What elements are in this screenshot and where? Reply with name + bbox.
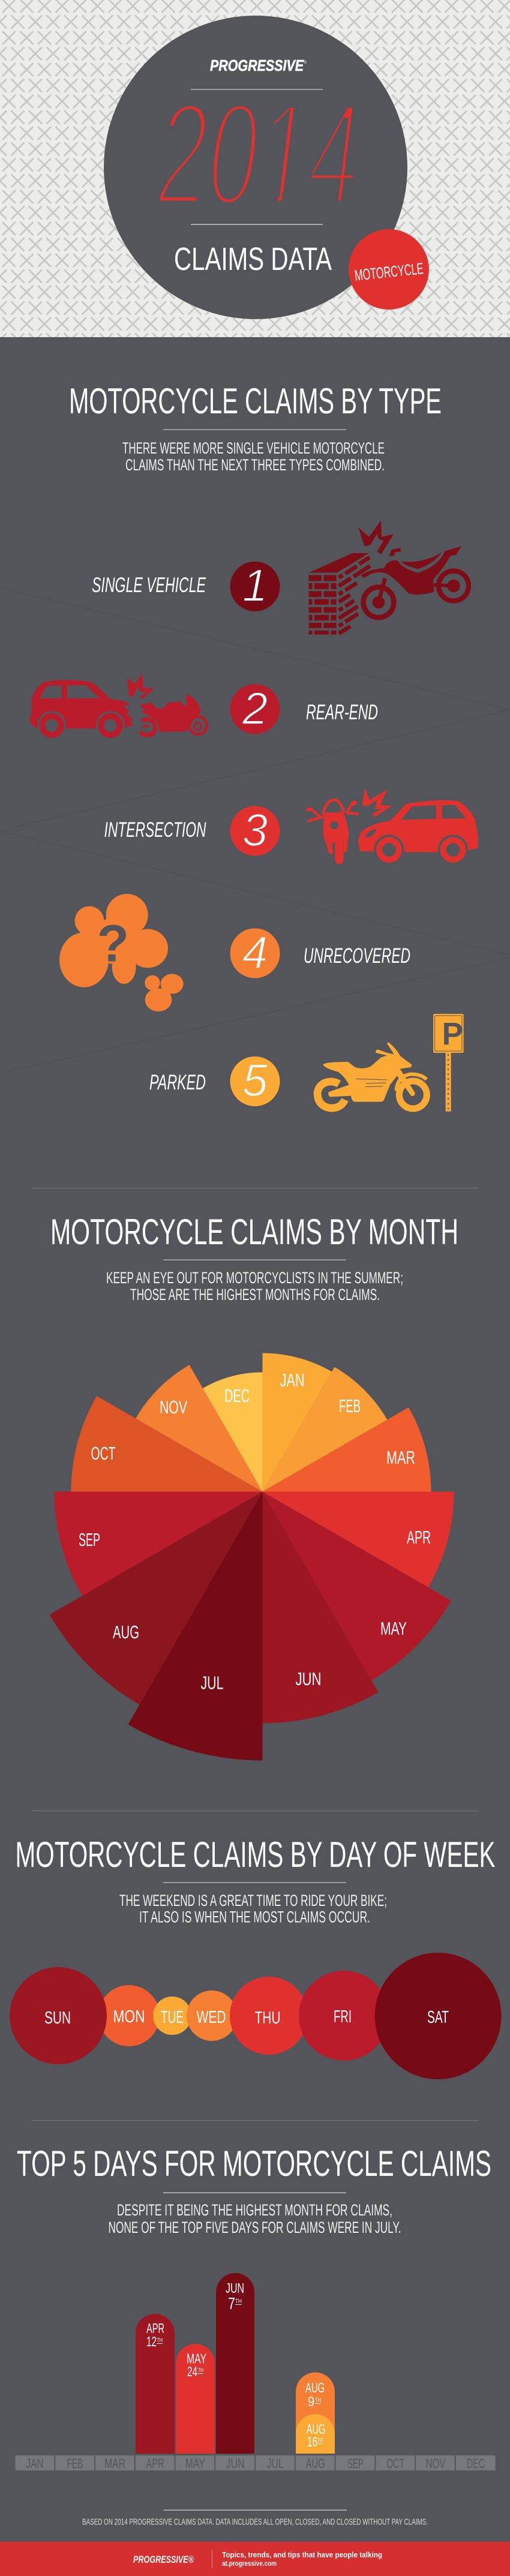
day labels: SAT [427,2008,449,2027]
month axis: MAY [185,2456,205,2471]
month labels: NOV [160,1397,187,1418]
number 1: 1 [242,560,268,611]
day labels [44,2007,449,2028]
month axis: FEB [67,2456,83,2471]
claims data title: CLAIMS DATA [174,241,332,277]
dark circle [104,16,407,319]
number 1 [230,560,280,611]
month axis: JAN [26,2456,43,2471]
month labels: MAY [380,1618,407,1639]
bar: Aug 9: AUG [305,2380,325,2395]
month axis: JUN [226,2456,245,2471]
bar: Apr 12: 12 [146,2334,157,2349]
month labels: JUN [295,1668,322,1689]
wedge: SEP [54,1491,263,1596]
label: unrecovered: UNRECOVERED [304,944,410,968]
intro text [106,1269,403,1304]
bar: Aug 9 [296,2372,335,2454]
section: claims by day of week [10,1835,502,2079]
wedge: APR [263,1491,454,1587]
label: intersection: INTERSECTION [104,818,206,842]
day labels: TUE [161,2008,184,2027]
month axis: JUL [267,2456,284,2471]
icon: car rear-ending motorcycle [29,674,207,740]
bubble: FRI [299,1971,389,2061]
month axis: SEP [347,2456,364,2471]
number 3: 3 [242,805,268,856]
wedge: JUN [263,1491,378,1723]
bar: Aug 9: 9 [308,2394,314,2409]
wedge: NOV [136,1365,263,1491]
month labels [79,1370,431,1693]
bar: Aug 16 [296,2414,335,2454]
intro text: THOSE ARE THE HIGHEST MONTHS FOR CLAIMS. [130,1286,380,1304]
section: claims by month [49,1212,458,1760]
number 3 [230,805,280,856]
Progressive logo: ® [304,60,307,65]
bubble: TUE [153,1996,191,2035]
bubble: MON [98,1985,160,2046]
icon: motorcycle hitting brick wall [309,520,469,635]
number 2: 2 [242,683,268,734]
month labels: JUL [200,1673,223,1693]
icon: motorcycle and car at intersection [306,788,478,865]
bar: May 24: MAY [187,2350,206,2366]
month axis: AUG [306,2456,325,2471]
bar: May 24 [176,2344,215,2454]
year 2014: 2014 [149,73,371,236]
bar: Jun 7: TH [235,2298,242,2305]
number 5 [230,1055,280,1106]
bar: Apr 12: APR [146,2320,164,2336]
footer url: at.progressive.com [222,2560,277,2568]
bar: Aug 16: 16 [307,2434,317,2449]
month axis: APR [146,2456,164,2471]
icon: parked motorcycle and parking sign [317,1014,464,1112]
motorcycle badge [349,229,429,310]
month labels: JAN [280,1370,305,1391]
month labels: OCT [91,1443,116,1464]
label: single vehicle: SINGLE VEHICLE [92,574,206,597]
footer logo: PROGRESSIVE® [133,2554,194,2565]
month axis: MAR [104,2456,125,2471]
number 2 [230,683,280,734]
month labels: DEC [224,1385,250,1406]
wedge: AUG [49,1491,263,1705]
day labels: FRI [334,2007,352,2026]
bubble: THU [230,1977,308,2055]
wedge: MAY [263,1491,451,1680]
bubble: WED [187,1990,237,2041]
day labels: THU [254,2008,281,2028]
bar: Apr 12 [136,2314,175,2454]
bar: May 24: TH [198,2367,203,2374]
day labels: MON [113,2007,145,2026]
month labels: SEP [79,1529,100,1550]
footer band [0,2542,510,2576]
label: parked: PARKED [149,1071,206,1094]
section: top 5 days [16,2143,496,2471]
day labels: SUN [44,2008,71,2028]
intro text: IT ALSO IS WHEN THE MOST CLAIMS OCCUR. [139,1908,370,1926]
number 5: 5 [242,1055,268,1106]
bar chart [16,2273,496,2471]
bar: Aug 16: AUG [306,2421,325,2437]
month labels: AUG [113,1622,139,1643]
bar: May 24: 24 [187,2364,197,2379]
bubble chart [10,1953,502,2079]
bar: Apr 12: TH [157,2337,163,2344]
footer tagline: Topics, trends, and tips that have people talking [222,2550,382,2559]
icon: parked motorcycle and parking sign: P [442,1017,463,1052]
wedge: FEB [263,1367,387,1491]
bar: Jun 7: 7 [228,2294,235,2313]
bar: Aug 16: TH [317,2437,323,2444]
day labels: WED [197,2008,226,2027]
number 4: 4 [242,927,268,978]
icon: cloud with question mark: ? [97,914,129,973]
month axis: NOV [426,2456,446,2471]
wedge: JUL [128,1491,263,1760]
icon: cloud with question mark [59,894,184,1011]
bubble: SUN [10,1967,107,2064]
month axis [16,2455,496,2471]
number 4 [230,927,280,978]
label: rear-end: REAR-END [306,701,378,724]
bubble: SAT [374,1953,502,2079]
intro text [108,2201,401,2236]
Progressive logo: PROGRESSIVE [210,56,304,74]
month labels: FEB [339,1395,361,1416]
wedge: JAN [263,1353,332,1491]
intro text [119,1892,387,1926]
bar: Jun 7: JUN [226,2280,244,2296]
polar chart [49,1353,454,1760]
motorcycle badge: MOTORCYCLE [353,259,424,284]
intro text [122,439,385,474]
wedge: MAR [263,1407,431,1491]
bar: Aug 9: TH [315,2397,321,2404]
month axis: DEC [467,2456,485,2471]
section: claims by type [29,381,478,1112]
month labels: MAR [386,1447,415,1468]
bar: Jun 7 [216,2273,254,2454]
month axis: OCT [386,2456,404,2471]
month labels: APR [407,1527,431,1548]
wedge: OCT [71,1396,262,1491]
patterned light header background [0,0,510,337]
wedge: DEC [203,1373,263,1491]
header badge [104,16,429,319]
